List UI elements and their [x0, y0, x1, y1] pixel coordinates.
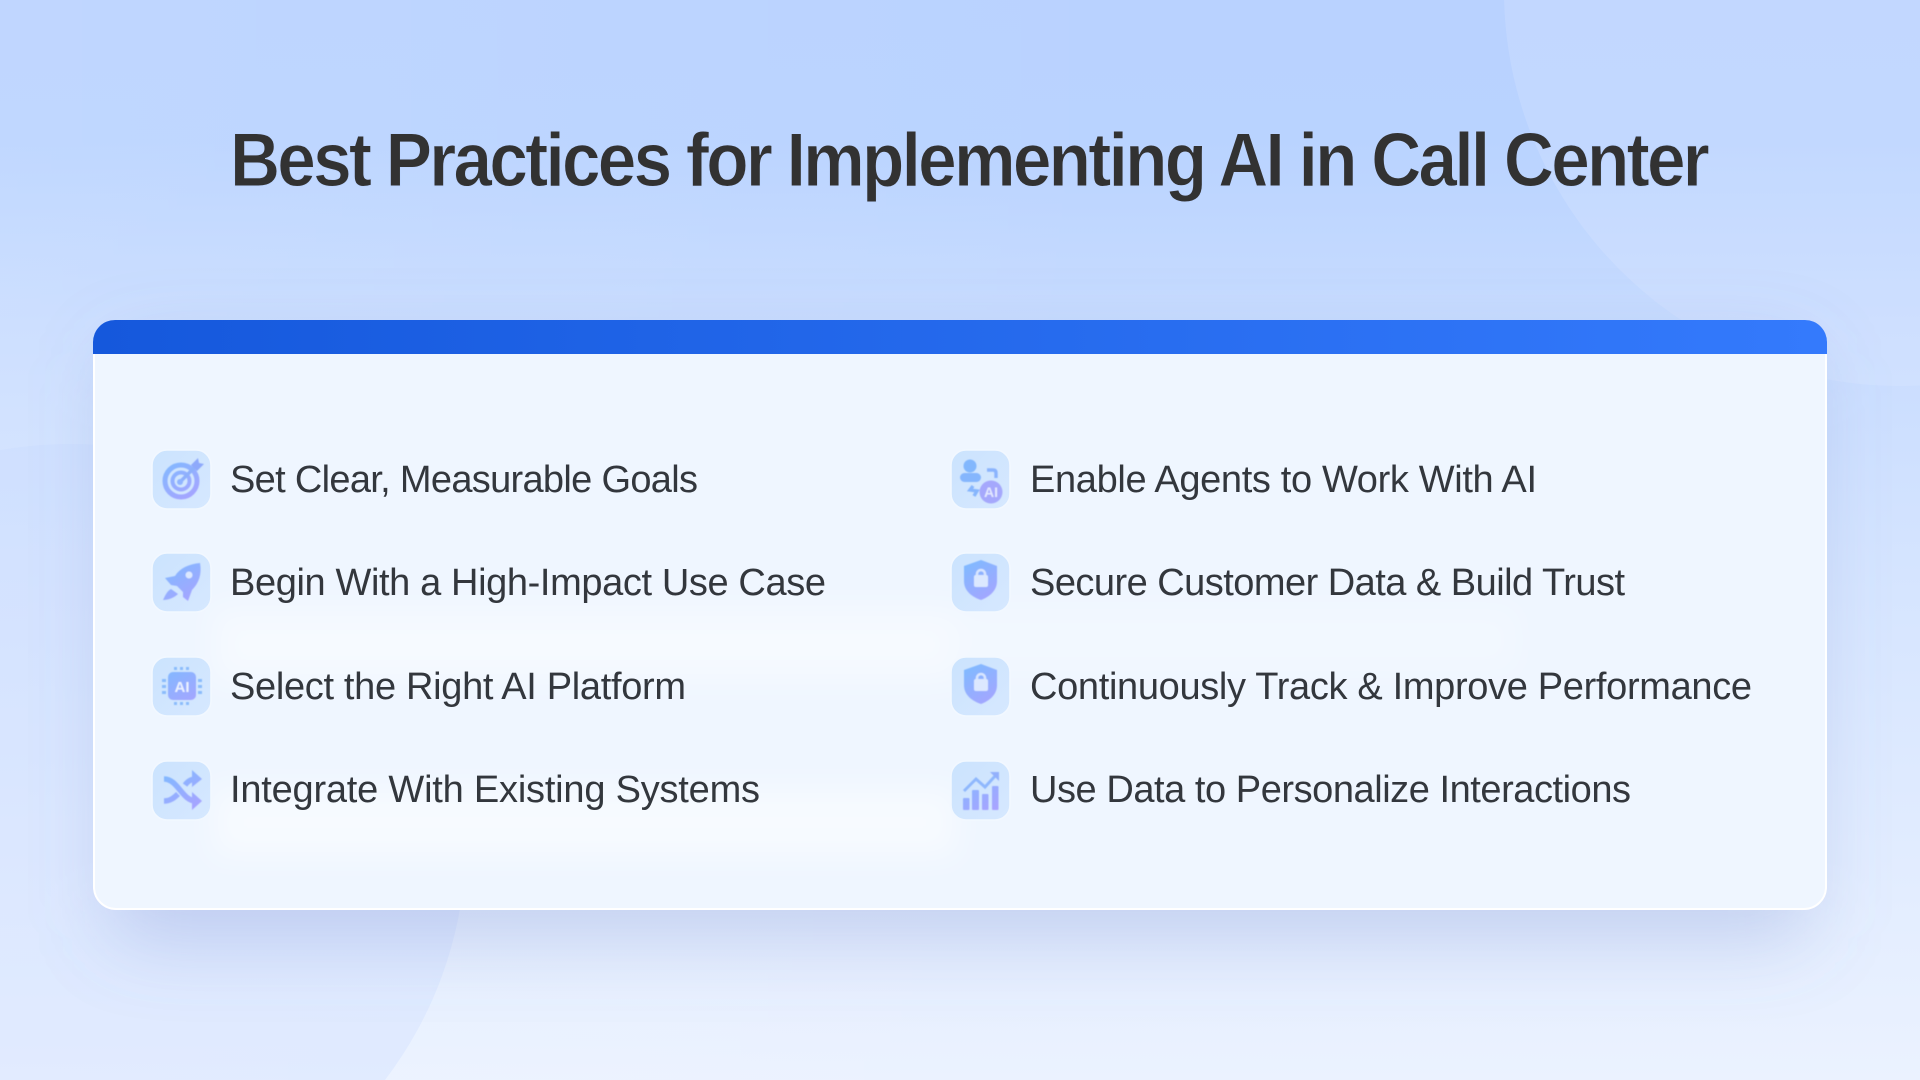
- title: Best Practices for Implementing AI in Call Center: [230, 118, 1709, 203]
- icon: rocket: [152, 553, 211, 612]
- soft glow bands: [215, 610, 1515, 855]
- icon: AI chip: [152, 657, 211, 716]
- icon: AI chip: AI: [174, 679, 190, 696]
- panel: best practices card: [93, 320, 1827, 909]
- item: integrate systems: [152, 761, 760, 820]
- icon: growth chart: [951, 761, 1010, 820]
- card body: [94, 321, 1826, 909]
- item: agents work with AI: [951, 450, 1537, 509]
- item: secure customer data: [951, 553, 1625, 612]
- icon: agent and AI: [951, 450, 1010, 509]
- card header bar: [93, 320, 1827, 354]
- item: personalize interactions: [951, 761, 1631, 820]
- label: Select the Right AI Platform: [230, 666, 686, 708]
- decorative circle: bottom left: [0, 444, 466, 1080]
- item: set clear goals: [152, 450, 698, 509]
- label: Integrate With Existing Systems: [230, 769, 760, 811]
- item: right AI platform: [152, 657, 686, 716]
- label: Continuously Track & Improve Performance: [1030, 666, 1752, 708]
- label: Secure Customer Data & Build Trust: [1030, 562, 1625, 604]
- item: track performance: [951, 657, 1752, 716]
- label: Set Clear, Measurable Goals: [230, 459, 698, 501]
- icon: shuffle arrows: [152, 761, 211, 820]
- label: Enable Agents to Work With AI: [1030, 459, 1537, 501]
- icon: shield with lock: [951, 657, 1010, 716]
- card shadow: [110, 350, 1810, 940]
- label: Begin With a High-Impact Use Case: [230, 562, 826, 604]
- icon: agent and AI: AI: [984, 484, 998, 500]
- decorative circle: top right: [1504, 0, 1920, 386]
- icon: target: [152, 450, 211, 509]
- label: Use Data to Personalize Interactions: [1030, 769, 1631, 811]
- icon: shield with lock: [951, 553, 1010, 612]
- item: high-impact use case: [152, 553, 826, 612]
